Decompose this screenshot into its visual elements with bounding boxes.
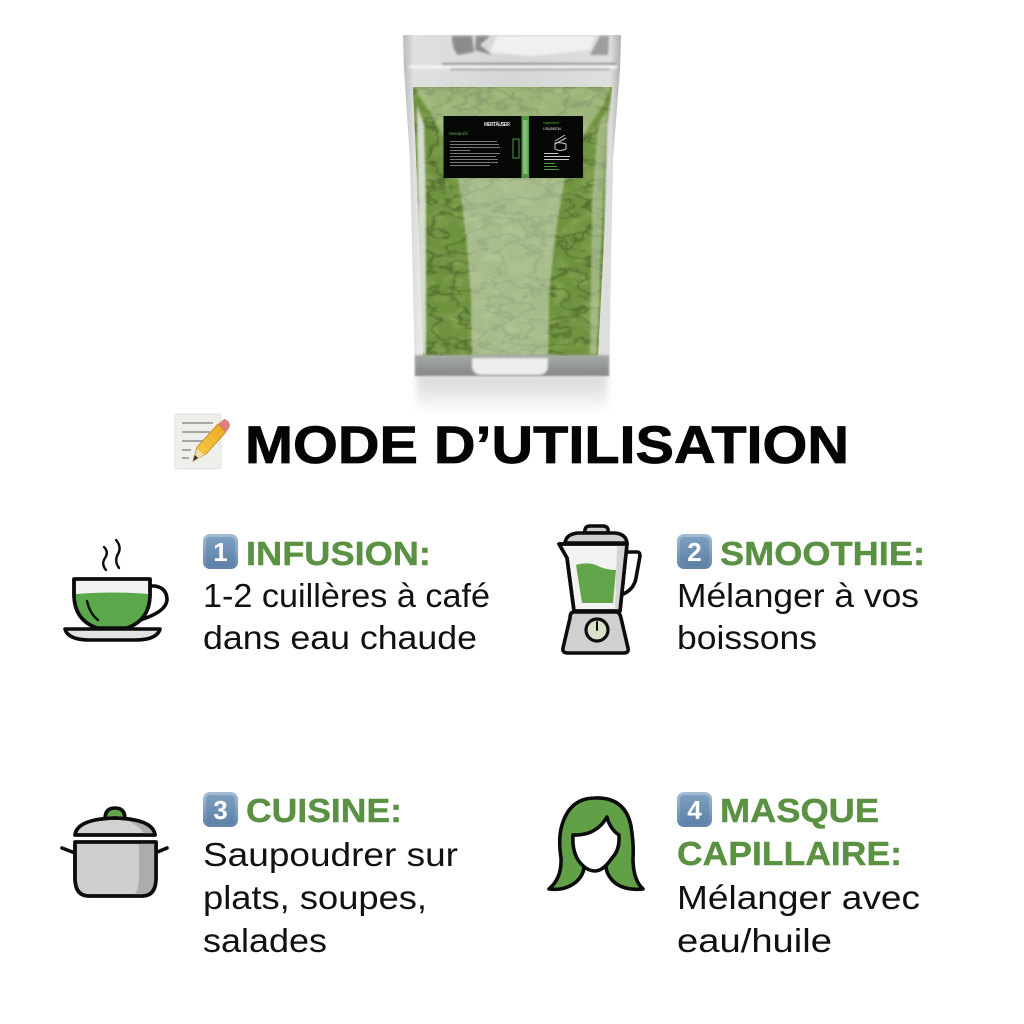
- title: [175, 414, 849, 475]
- step 2: smoothie: [559, 526, 925, 656]
- step 1 heading: INFUSION:: [246, 535, 431, 572]
- pouch label: UTILISATION: [543, 126, 561, 131]
- step 4: masque capillaire: [549, 792, 920, 959]
- pouch foil body: [403, 35, 621, 376]
- step 4 badge: 4: [687, 795, 702, 825]
- icon: pot: [62, 808, 167, 896]
- step 1 text: dans eau chaude: [203, 619, 477, 656]
- icon: memo and pencil: [175, 414, 230, 469]
- step 4 badge: [677, 792, 712, 827]
- step 1 text: [203, 577, 490, 656]
- pouch shadow: [417, 375, 607, 413]
- step 3 text: Saupoudrer sur: [203, 836, 458, 873]
- step 1 text: 1-2 cuillères à café: [203, 577, 490, 614]
- step 4 text: Mélanger avec: [677, 879, 920, 916]
- step 3: cuisine: [62, 792, 458, 959]
- centre translucent window: [458, 178, 565, 375]
- pouch label: MERTÄUSER: [484, 121, 510, 128]
- icon: blender: [559, 526, 640, 653]
- upper translucent window: [414, 87, 611, 178]
- step 3 text: salades: [203, 922, 327, 959]
- step 4 heading: MASQUE: [720, 792, 879, 829]
- icon: tea cup: [65, 540, 167, 640]
- right side strip: [590, 110, 607, 354]
- step 3 heading: CUISINE:: [246, 792, 402, 829]
- step 4 text: eau/huile: [677, 922, 832, 959]
- step 2 badge: [677, 534, 712, 569]
- step 3 text: [203, 836, 458, 959]
- pouch label: Descripción: [449, 131, 468, 136]
- step 2 badge: 2: [687, 537, 702, 567]
- product pouch: [403, 35, 621, 413]
- pouch label: Ingredient: [543, 120, 560, 125]
- pouch label: [444, 116, 583, 178]
- pouch top highlights: [409, 36, 617, 69]
- step 1 badge: 1: [213, 537, 228, 567]
- step 3 badge: 3: [213, 795, 228, 825]
- step 2 text: Mélanger à vos: [677, 577, 919, 614]
- heading text: MODE D’UTILISATION: [245, 416, 849, 475]
- left side strip: [416, 105, 426, 354]
- step 2 heading: SMOOTHIE:: [720, 535, 925, 572]
- step 2 text: [677, 577, 919, 656]
- clear bottom tab: [472, 358, 548, 375]
- right foil strip: [604, 88, 612, 354]
- step 4 heading: CAPILLAIRE:: [677, 835, 902, 872]
- icon: woman hair: [549, 798, 643, 889]
- bottom foil: [415, 355, 609, 376]
- step 3 badge: [203, 792, 238, 827]
- step 4 text: [677, 879, 920, 959]
- step 1 badge: [203, 534, 238, 569]
- step 2 text: boissons: [677, 619, 817, 656]
- powder: [410, 85, 615, 360]
- step 1: infusion: [65, 534, 490, 656]
- step 3 text: plats, soupes,: [203, 879, 427, 916]
- step 4 heading: [677, 792, 902, 872]
